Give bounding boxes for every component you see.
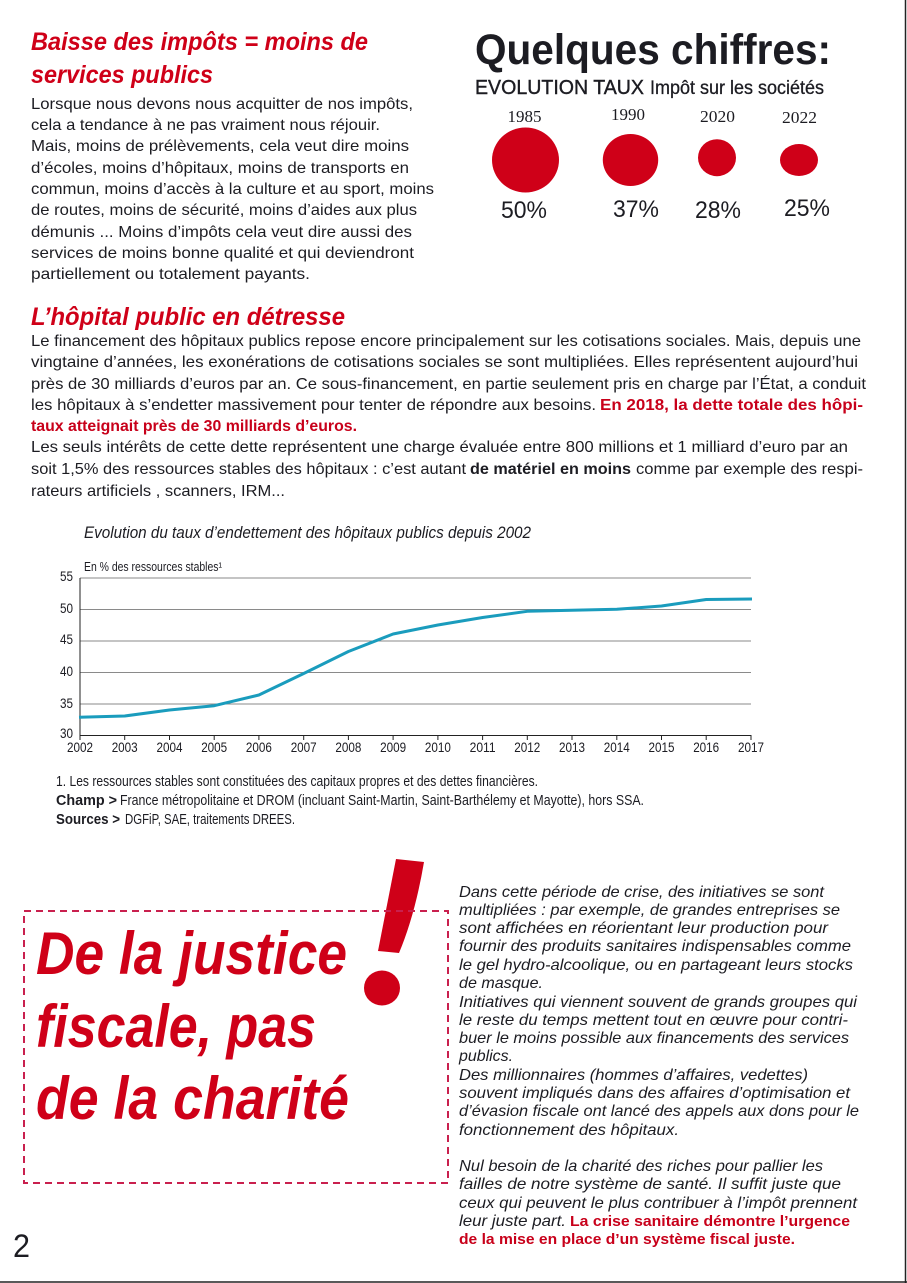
text block: initiatives et charité: Nul besoin de la charité des riches pour pallier les [459,1158,823,1175]
text block: initiatives et charité: d’évasion fiscale ont lancé des appels aux dons pour le [459,1103,859,1120]
stat: 1985, 50%: 1985 [508,107,542,126]
y axis labels: 55 [60,568,73,584]
heading: quelques chiffres: Quelques chiffres: [475,26,831,74]
text block: hôpital public: de matériel en moins [470,461,631,478]
line chart [60,568,764,755]
text block: hôpital public: Les seuls intérêts de cette dette représentent une charge évaluée entre 800 millions et 1 milliard d’euro par an [31,439,848,456]
text block: hôpital public: soit 1,5% des ressources stables des hôpitaux : c’est autant [31,461,467,478]
stat: 1985, 50%: 50% [501,197,547,224]
heading: baisse des impôts: services publics [31,61,213,89]
y axis labels: 50 [60,600,73,616]
text block: hôpital public [31,333,867,500]
text block: baisse des impôts: Lorsque nous devons nous acquitter de nos impôts, [31,96,413,113]
y axis labels: 45 [60,631,73,647]
x axis labels: 2008 [335,739,362,755]
slogan: fiscale, pas [36,993,316,1060]
chart footnotes: 1. Les ressources stables sont constituées des capitaux propres et des dettes financières. [56,774,538,790]
text block: initiatives et charité: buer le moins possible aux financements des services [459,1030,849,1047]
stat: 1990, 37% [603,105,659,223]
text block: initiatives et charité: publics. [458,1048,513,1065]
text block: initiatives et charité [458,884,859,1248]
text block: initiatives et charité: sont affichées en réorientant leur production pour [459,920,829,937]
x axis labels: 2015 [648,739,675,755]
text block: initiatives et charité: de la mise en place d’un système fiscal juste. [459,1231,795,1248]
x axis labels: 2011 [470,739,496,755]
stat: 2022, 25% [780,108,830,222]
stat: 2020, 28% [695,107,741,224]
y axis labels: 40 [60,663,73,679]
slogan [36,920,349,1132]
x axis labels: 2003 [112,739,138,755]
text block: hôpital public: rateurs artificiels , scanners, IRM... [31,483,285,500]
chart footnotes: France métropolitaine et DROM (incluant Saint-Martin, Saint-Barthélemy et Mayotte), hors SSA. [120,793,644,809]
panel: quelques chiffres [475,26,831,224]
text block: baisse des impôts: cela a tendance à ne pas vraiment nous réjouir. [31,117,380,134]
stat: 2022, 25%: 25% [784,195,830,222]
x axis labels: 2006 [246,739,272,755]
text block: initiatives et charité: le gel hydro-alcoolique, ou en partageant leurs stocks [459,957,853,974]
x axis labels: 2010 [425,739,451,755]
text block: initiatives et charité: Initiatives qui viennent souvent de grands groupes qui [459,994,858,1011]
heading: hôpital public: L’hôpital public en détresse [31,303,345,331]
text block: initiatives et charité: Dans cette période de crise, des initiatives se sont [459,884,825,901]
text block: baisse des impôts: partiellement ou totalement payants. [31,266,310,283]
x axis labels: 2012 [514,739,540,755]
x axis labels [67,739,764,755]
axis unit label: En % des ressources stables¹ [84,559,223,574]
x axis labels: 2004 [156,739,183,755]
subheading: évolution du taux: Impôt sur les sociétés [650,78,824,99]
stat: 1990, 37%: 37% [613,196,659,223]
subheading: évolution du taux: EVOLUTION TAUX [475,77,644,99]
text block: hôpital public: taux atteignait près de 30 milliards d’euros. [31,418,357,435]
x axis labels: 2009 [380,739,406,755]
text block: baisse des impôts: de routes, moins de sécurité, moins d’aides aux plus [31,202,417,219]
text block: initiatives et charité: Des millionnaires (hommes d’affaires, vedettes) [459,1067,808,1084]
text block: baisse des impôts: services de moins bonne qualité et qui deviendront [31,245,415,262]
text block: baisse des impôts [31,96,434,283]
text block: hôpital public: les hôpitaux à s’endetter massivement pour tenter de répondre aux besoins. [31,397,596,414]
chart footnotes: Champ > [56,793,117,809]
x axis labels: 2007 [291,739,317,755]
text block: baisse des impôts: d’écoles, moins d’hôpitaux, moins de transports en [31,160,409,177]
heading: baisse des impôts [31,28,368,89]
text block: hôpital public: vingtaine d’années, les exonérations de cotisations sociales se sont multipliées. Elles représentent aujourd’hui [31,354,858,371]
x axis labels: 2005 [201,739,227,755]
text block: initiatives et charité: La crise sanitaire démontre l’urgence [570,1213,850,1230]
x axis labels: 2016 [693,739,719,755]
text block: initiatives et charité: souvent impliqués dans des affaires d’optimisation et [459,1085,851,1102]
stat: 2020, 28%: 28% [695,197,741,224]
text block: initiatives et charité: leur juste part. [459,1213,566,1230]
text block: hôpital public: Le financement des hôpitaux publics repose encore principalement sur les cotisations sociales. Mais, depuis une [31,333,861,350]
y axis labels: 35 [60,695,73,711]
y axis labels [60,568,73,741]
chart footnotes [56,774,644,828]
page number: 2 [13,1228,30,1264]
x axis labels: 2014 [604,739,630,755]
subheading: évolution du taux [475,77,824,99]
text block: hôpital public: En 2018, la dette totale des hôpi- [600,397,863,414]
stat: 1985, 50% [492,107,559,224]
panel: line chart endettement [56,524,764,828]
text block: initiatives et charité: le reste du temps mettent tout en œuvre pour contri- [459,1012,848,1029]
text block: hôpital public: comme par exemple des respi- [636,461,863,478]
slogan: De la justice [36,920,347,987]
panel: baisse des impôts [31,28,434,283]
data line [79,599,752,717]
text block: initiatives et charité: fonctionnement des hôpitaux. [459,1122,679,1139]
panel: de la justice fiscale [24,859,448,1183]
text block: initiatives et charité: fournir des produits sanitaires indispensables comme [459,938,851,955]
heading: baisse des impôts: Baisse des impôts = moins de [31,28,368,56]
chart footnotes: Sources > [56,812,120,828]
x axis labels: 2017 [738,739,764,755]
text block: initiatives et charité: de masque. [459,975,543,992]
dashed frame [24,911,448,1183]
x axis labels: 2013 [559,739,585,755]
stat: 2020, 28%: 2020 [700,107,735,126]
stat: 1990, 37%: 1990 [611,105,645,124]
text block: initiatives et charité: failles de notre système de santé. Il suffit juste que [459,1176,841,1193]
text block: initiatives et charité: ceux qui peuvent le plus contribuer à l’impôt prennent [459,1195,858,1212]
text block: baisse des impôts: démunis ... Moins d’impôts cela veut dire aussi des [31,224,412,241]
text block: baisse des impôts: commun, moins d’accès à la culture et au sport, moins [31,181,434,198]
icon: exclamation mark [364,859,424,1006]
stat: 2022, 25%: 2022 [782,108,817,127]
slogan: de la charité [36,1065,349,1132]
text block: hôpital public: près de 30 milliards d’euros par an. Ce sous-financement, en partie seulement pris en charge par l’État, a conduit [31,374,867,393]
text block: initiatives et charité: multipliées : par exemple, de grandes entreprises se [459,902,840,919]
panel: hôpital public en détresse [31,303,867,500]
text block: baisse des impôts: Mais, moins de prélèvements, cela veut dire moins [31,138,409,155]
chart footnotes: DGFiP, SAE, traitements DREES. [125,812,295,828]
x axis labels: 2002 [67,739,93,755]
chart title: Evolution du taux d’endettement des hôpitaux publics depuis 2002 [84,524,531,542]
y axis labels: 30 [60,725,73,741]
